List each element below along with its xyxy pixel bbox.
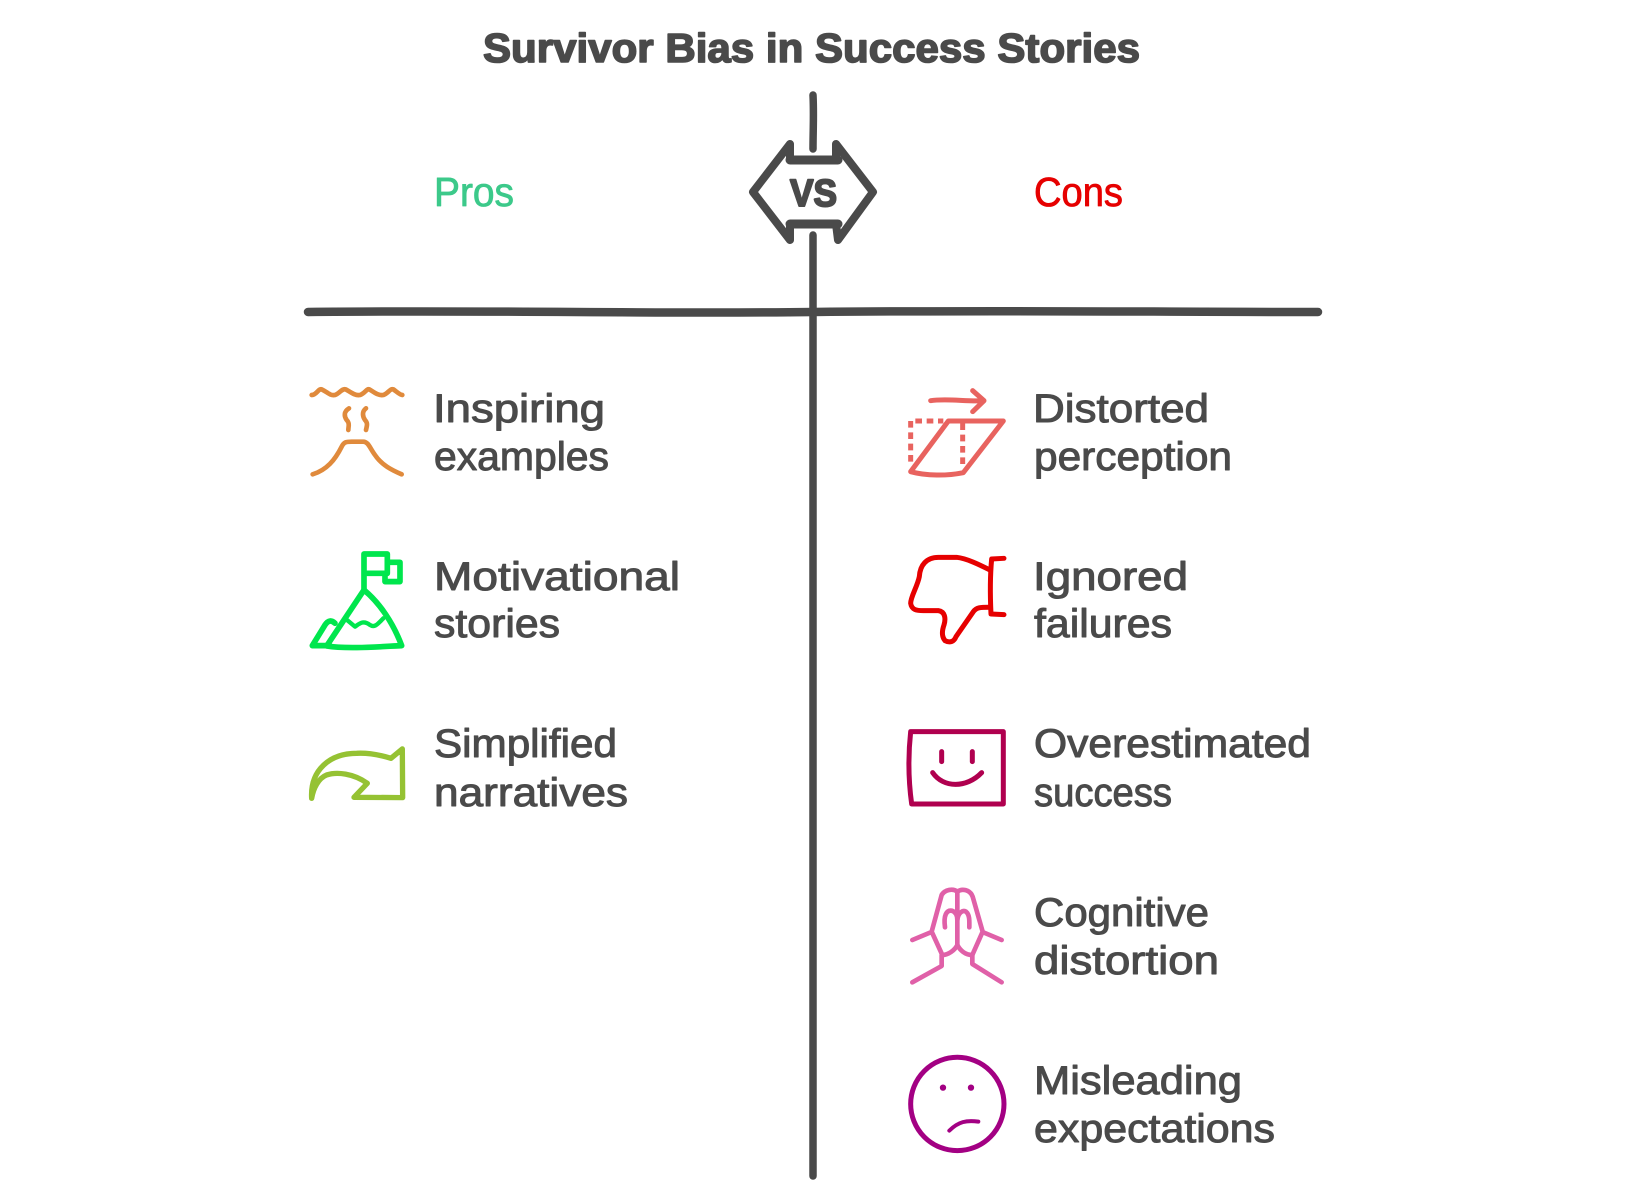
icon: smiling rectangle (909, 732, 1003, 804)
label: Motivational stories (434, 555, 680, 646)
label: Simplified narratives: narratives (434, 771, 628, 815)
icon: thumbs down (911, 557, 1004, 642)
label: Overestimated success: Overestimated (1034, 722, 1311, 766)
label: Distorted perception: Distorted (1033, 387, 1209, 431)
label: Cognitive distortion (1034, 891, 1219, 983)
title: Survivor Bias in Success Stories (483, 25, 1140, 71)
vertical divider main segment (809, 235, 818, 1176)
label: Inspiring examples: examples (434, 435, 609, 479)
heading: Pros: Pros (434, 169, 514, 215)
label: Simplified narratives: Simplified (434, 722, 617, 766)
label: Motivational stories: Motivational (434, 555, 680, 599)
label: Inspiring examples (433, 387, 609, 479)
VS badge (753, 144, 873, 240)
label: Inspiring examples: Inspiring (433, 387, 605, 431)
icon: curved arrow (312, 749, 403, 798)
label: Distorted perception (1033, 387, 1232, 479)
heading: Cons: Cons (1034, 169, 1123, 215)
label: Misleading expectations: expectations (1034, 1107, 1275, 1151)
label: Simplified narratives (434, 722, 628, 815)
icon: volcano (312, 389, 402, 474)
label: Motivational stories: stories (434, 602, 560, 646)
label: Cognitive distortion: distortion (1034, 939, 1219, 983)
icon: distorted parallelogram (911, 391, 1003, 475)
icon: praying hands (912, 890, 1002, 982)
label: Misleading expectations (1034, 1059, 1275, 1151)
label: Overestimated success: success (1034, 771, 1172, 815)
label: Ignored failures: Ignored (1033, 555, 1188, 599)
icon: mountain with flag (312, 554, 402, 648)
VS badge: VS (790, 173, 837, 215)
label: Overestimated success (1034, 722, 1311, 815)
vertical divider top segment (809, 95, 817, 149)
icon: sad face (911, 1057, 1004, 1151)
label: Ignored failures (1033, 555, 1188, 646)
label: Misleading expectations: Misleading (1034, 1059, 1242, 1103)
label: Cognitive distortion: Cognitive (1034, 891, 1209, 935)
label: Distorted perception: perception (1034, 435, 1232, 479)
horizontal divider (308, 311, 1318, 313)
label: Ignored failures: failures (1034, 602, 1172, 646)
